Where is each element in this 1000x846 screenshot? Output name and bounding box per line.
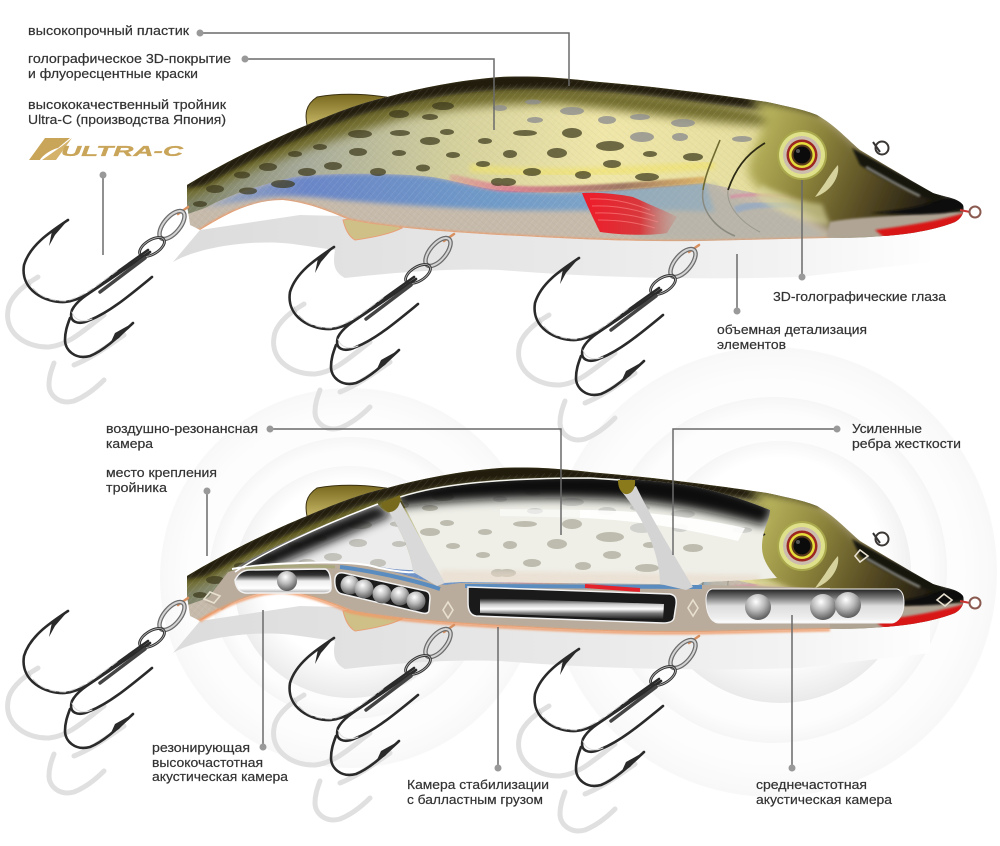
label: reinforced ribs bbox=[852, 422, 961, 451]
label: stabilisation chamber: с балластным грузом bbox=[407, 793, 543, 807]
label: reinforced ribs: Усиленные bbox=[852, 422, 922, 436]
label: mid-frequency chamber: среднечастотная bbox=[756, 778, 867, 792]
label: treble hook: Ultra-C (производства Япония) bbox=[28, 113, 226, 127]
label: volumetric detail: объемная детализация bbox=[717, 323, 867, 337]
stiffening rib rear bbox=[388, 498, 445, 586]
lure body bbox=[170, 65, 980, 242]
rib knots bbox=[381, 495, 400, 512]
leader lines and dots bbox=[100, 30, 840, 772]
label: high-frequency chamber: высокочастотная bbox=[152, 756, 263, 770]
front rib knot bbox=[618, 480, 635, 494]
sound waves: left rings bbox=[160, 388, 540, 768]
label: holographic coating: голографическое 3D-покрытие bbox=[28, 52, 231, 66]
label: high-frequency chamber: резонирующая bbox=[152, 741, 250, 755]
label: treble hook: высококачественный тройник bbox=[28, 98, 227, 112]
sound waves: right rings bbox=[547, 347, 997, 797]
treble hook: middle bbox=[290, 625, 455, 775]
resonating chamber with five balls bbox=[335, 573, 430, 613]
label: hook mount bbox=[106, 466, 217, 495]
treble hook: front bbox=[535, 636, 700, 786]
label: high-strength plastic: высокопрочный пластик bbox=[28, 24, 190, 38]
label: air-resonant chamber bbox=[106, 422, 258, 451]
lower body shell bbox=[205, 561, 830, 631]
blue strip above chambers bbox=[340, 567, 702, 589]
label: holographic coating: и флуоресцентные краски bbox=[28, 67, 198, 81]
orange belly edge bbox=[200, 592, 830, 633]
treble hook: tail bbox=[24, 207, 189, 357]
label: stabilisation chamber bbox=[407, 778, 549, 807]
main air-resonant chamber bbox=[400, 478, 777, 585]
stiffening rib front bbox=[622, 486, 693, 590]
treble hook: front bbox=[535, 245, 700, 395]
logo: Ultra-C bbox=[29, 138, 184, 160]
top shell outline bbox=[400, 478, 620, 497]
label: holographic coating bbox=[28, 52, 231, 81]
high-frequency chamber with ball bbox=[235, 569, 331, 593]
label: 3D eyes: 3D-голографические глаза bbox=[773, 290, 946, 304]
bottom lure: cutaway view bbox=[24, 456, 980, 786]
icon: 3D eye bbox=[777, 130, 827, 180]
air chamber outlines bbox=[235, 504, 378, 572]
label: air-resonant chamber: воздушно-резонансная bbox=[106, 422, 258, 436]
bottom lure shadow bbox=[173, 606, 930, 669]
label: treble hook bbox=[28, 98, 227, 127]
white rim under rear chamber bbox=[232, 563, 415, 572]
label: high-frequency chamber: акустическая камера bbox=[152, 770, 288, 784]
logo: Ultra-C: ULTRA-C bbox=[61, 144, 184, 160]
label: hook mount: тройника bbox=[106, 481, 167, 495]
top lure: exterior view bbox=[24, 65, 980, 395]
rear air chamber bbox=[232, 504, 413, 570]
label: reinforced ribs: ребра жесткости bbox=[852, 437, 961, 451]
top lure shadow bbox=[173, 215, 930, 278]
label: hook mount: место крепления bbox=[106, 466, 217, 480]
label: mid-frequency chamber: акустическая камера bbox=[756, 793, 892, 807]
lure body bbox=[170, 456, 980, 633]
label: mid-frequency chamber bbox=[756, 778, 892, 807]
mid-frequency chamber with balls bbox=[706, 589, 904, 623]
label: high-frequency chamber bbox=[152, 741, 288, 784]
hook shadows bbox=[8, 277, 635, 831]
label: stabilisation chamber: Камера стабилизации bbox=[407, 778, 549, 792]
hook mount diamonds bbox=[204, 550, 952, 618]
label: volumetric detail: элементов bbox=[717, 338, 786, 352]
red fin peek bbox=[585, 586, 640, 590]
stabilisation chamber with ballast bbox=[468, 587, 676, 623]
treble hook: tail bbox=[24, 598, 189, 748]
label: air-resonant chamber: камера bbox=[106, 437, 153, 451]
holographic strip above chamber A bbox=[245, 566, 335, 569]
icon: eye bbox=[777, 521, 827, 571]
treble hook: middle bbox=[290, 234, 455, 384]
label: volumetric detail bbox=[717, 323, 867, 352]
